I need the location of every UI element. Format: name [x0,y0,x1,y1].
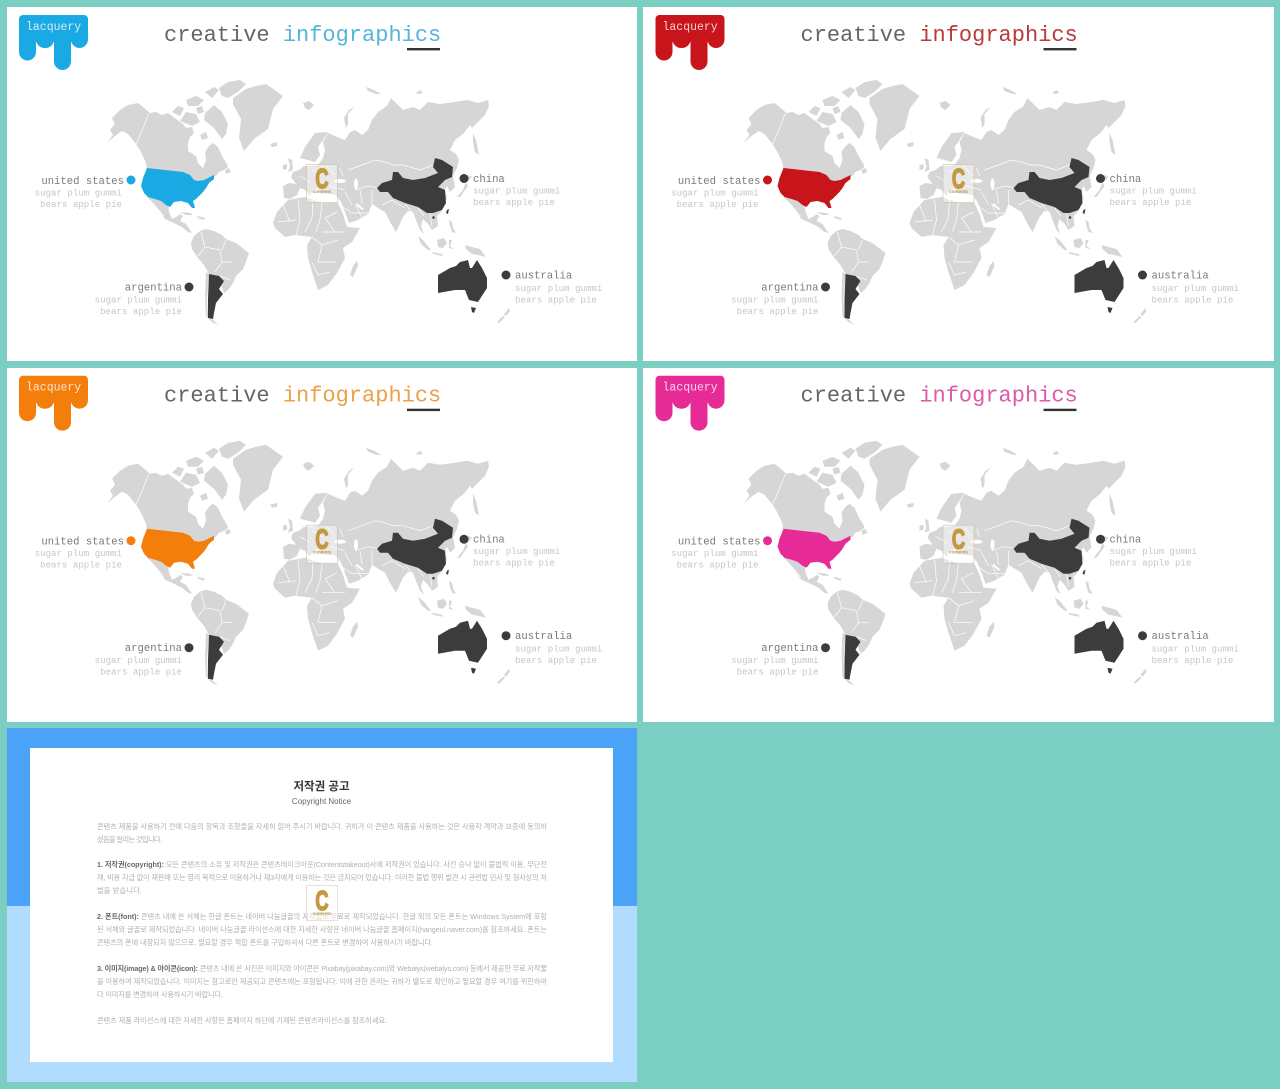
label: china: bears apple pie [1110,558,1191,569]
label: china: sugar plum gummi [473,186,560,196]
watermark: contents [949,189,968,194]
label: argentina [731,282,830,317]
label: united states: bears apple pie [40,560,122,571]
logo: pink lacquery drip: lacquery [662,382,718,395]
label: china: bears apple pie [473,197,555,208]
logo: orange lacquery drip: lacquery [26,382,81,395]
label: china [1096,535,1197,569]
label: united states: united states [41,537,124,549]
label: australia: bears apple pie [515,655,597,666]
label: united states [671,176,772,210]
label: argentina: argentina [125,643,182,655]
watermark: contents [313,189,332,194]
text block: 1. copyright [97,860,547,895]
watermark: C [952,525,965,556]
label: argentina [95,643,194,678]
title: creative infographics [164,384,441,409]
label: china: sugar plum gummi [1110,546,1197,557]
world map [744,80,1146,325]
panel: blue world map [7,7,637,361]
label: united states: bears apple pie [677,199,758,210]
text block: 2. font: 된 서체와 글꼴로 제작되었습니다. 네이버 나눔글꼴 라이선스에 대한 자세한 사항은 네이버 나눔글꼴 홈페이지(hangeul.naver.com)를 참조하세요. 폰트는 [97,925,547,934]
label: china: bears apple pie [1110,197,1191,208]
logo: pink lacquery drip [656,376,724,431]
text block: 2. font [97,912,547,947]
text block: introduction: 콘텐츠 제품을 사용하기 전에 다음의 항목과 조항들을 자세히 읽어 주시기 바랍니다. 귀하가 이 콘텐츠 제품을 사용하는 것은 사용자 계약과 보증에 동의하 [97,822,547,831]
label: argentina: sugar plum gummi [731,655,818,666]
panel: orange world map [7,368,637,722]
label: china [460,535,560,569]
label: united states: sugar plum gummi [671,188,758,198]
label: china: china [1110,174,1141,186]
watermark [943,525,974,563]
highlighted country: united states [141,168,214,208]
label: argentina: bears apple pie [100,306,182,317]
heading: copyright notice [292,779,352,806]
label: australia: sugar plum gummi [1152,644,1239,655]
label: argentina: bears apple pie [100,667,182,678]
watermark [943,164,974,202]
label: australia: sugar plum gummi [515,644,602,655]
label: united states [35,536,136,571]
logo: orange lacquery drip [19,376,88,431]
panel: pink world map [643,368,1274,722]
label: china: sugar plum gummi [473,546,560,557]
label: china: china [1110,535,1141,547]
highlighted countries: china, argentina, australia [208,158,487,319]
label: united states: united states [678,537,760,549]
text block: introduction [97,822,547,844]
label: china: china [473,174,505,186]
label: argentina: bears apple pie [737,667,818,678]
title underline [1044,48,1076,50]
title underline [407,48,440,50]
label: australia: australia [515,270,572,282]
world map [107,80,510,325]
label: united states [35,176,136,210]
highlighted country: united states [778,529,850,569]
label: australia [1138,631,1239,666]
label: united states: united states [41,176,124,188]
text block: 2. font: 2. 폰트(font): 콘텐츠 내에 쓴 서체는 한글 폰트는 네이버 나눔글꼴의 저작물로 무료로 제작되었습니다. 한글 외의 모든 폰트는 Windows System에 포함 [97,912,547,921]
watermark: contents [949,550,968,555]
heading: copyright notice: 저작권 공고 [293,779,350,793]
title underline [1044,409,1076,411]
text block: 3. image and icon: 다 이미지를 변경하여 사용하시기 바랍니다. [97,990,223,999]
label: australia: australia [1152,270,1209,282]
watermark: contents [313,911,332,916]
label: united states: sugar plum gummi [35,548,122,559]
highlighted country: united states [141,529,214,569]
text block: 3. image and icon: 3. 이미지(image) & 아이콘(icon): 콘텐츠 내에 쓴 사진은 이미지와 아이콘은 Pixabay(pixabay.com)와 Webalys(webalys.com) 등에서 제공한 무료 저작물 [97,964,547,973]
label: australia: sugar plum gummi [1152,283,1239,294]
label: australia: sugar plum gummi [515,283,602,294]
label: china: china [473,535,505,547]
label: australia [1138,270,1239,306]
label: australia [502,270,602,306]
label: argentina: sugar plum gummi [95,655,182,666]
label: united states [671,536,772,571]
title: creative infographics [164,23,441,48]
label: argentina: sugar plum gummi [95,294,182,306]
label: argentina: argentina [125,282,182,294]
text block: 2. font: 콘텐츠의 폰에 내장되지 않으므로, 필요할 경우 적합 폰트를 구입하셔서 다른 폰트로 변경하여 사용하시기 바랍니다. [97,938,433,947]
highlighted countries: china, argentina, australia [844,519,1124,680]
text block: 1. copyright: 벌을 받습니다. [97,886,142,895]
logo: red lacquery drip [656,15,724,70]
label: united states: bears apple pie [677,560,758,571]
label: united states: bears apple pie [40,199,122,210]
label: argentina: sugar plum gummi [731,294,818,306]
watermark: C [315,886,329,917]
highlighted countries: china, argentina, australia [844,158,1124,319]
label: china: sugar plum gummi [1110,186,1197,196]
watermark: C [315,525,329,556]
watermark: C [952,164,965,195]
highlighted countries: china, argentina, australia [208,519,487,680]
label: argentina: bears apple pie [737,306,818,317]
logo: blue lacquery drip: lacquery [26,21,81,34]
label: australia: bears apple pie [515,294,597,306]
label: australia: australia [1152,631,1209,643]
text block: 1. copyright: 재, 비용 지급 없이 재판매 또는 영리 목적으로 이용하거나 제3자에게 이용하는 것은 금지되어 있습니다. 이러한 불법 행위 발견 시 관련법 민사 및 형사상의 처 [97,873,547,882]
label: australia: bears apple pie [1152,294,1233,306]
title: creative infographics [800,23,1078,48]
text block: 3. image and icon: 을 이용하여 제작되었습니다. 이미지는 참고로만 제공되고 콘텐츠에는 포함됩니다. 이에 관한 권리는 귀하가 별도로 확인하고 필요할 경우 여기를 위한하여 [97,977,547,986]
watermark: C [315,164,329,195]
text block: license note: 콘텐츠 제품 라이선스에 대한 자세한 사항은 홈페이지 하단에 기재된 콘텐츠라이선스를 참조하세요. [97,1016,387,1025]
label: china: bears apple pie [473,558,555,569]
watermark: contents [313,550,332,555]
text block: 3. image and icon [97,964,547,999]
panel: red world map [643,7,1274,361]
label: united states: sugar plum gummi [35,188,122,198]
label: australia: bears apple pie [1152,655,1233,666]
logo: red lacquery drip: lacquery [662,21,718,34]
text block: introduction: 셨음을 알리는 것입니다. [97,835,162,844]
label: australia [502,631,602,666]
world map [107,441,510,686]
text block: 1. copyright: 1. 저작권(copyright): 모든 콘텐츠의 소유 및 저작권은 콘텐츠테이크아웃(Contentstakeout)사에 저작권이 있습니다. 사전 승낙 없이 불법적 이용, 무단전 [97,860,547,869]
panel: copyright notice [7,728,637,1082]
label: argentina: argentina [761,282,818,294]
logo: blue lacquery drip [19,15,88,70]
label: china [1096,174,1197,208]
label: china [460,174,560,208]
watermark [306,886,338,920]
label: argentina: argentina [761,643,818,655]
label: united states: united states [678,176,760,188]
label: united states: sugar plum gummi [671,548,758,559]
watermark [306,164,338,202]
label: argentina [731,643,830,678]
label: australia: australia [515,631,572,643]
title underline [407,409,440,411]
watermark [306,525,338,563]
highlighted country: united states [778,168,850,208]
label: argentina [95,282,194,317]
title: creative infographics [800,384,1078,409]
heading: copyright notice: Copyright Notice [292,797,352,806]
world map [744,441,1146,686]
